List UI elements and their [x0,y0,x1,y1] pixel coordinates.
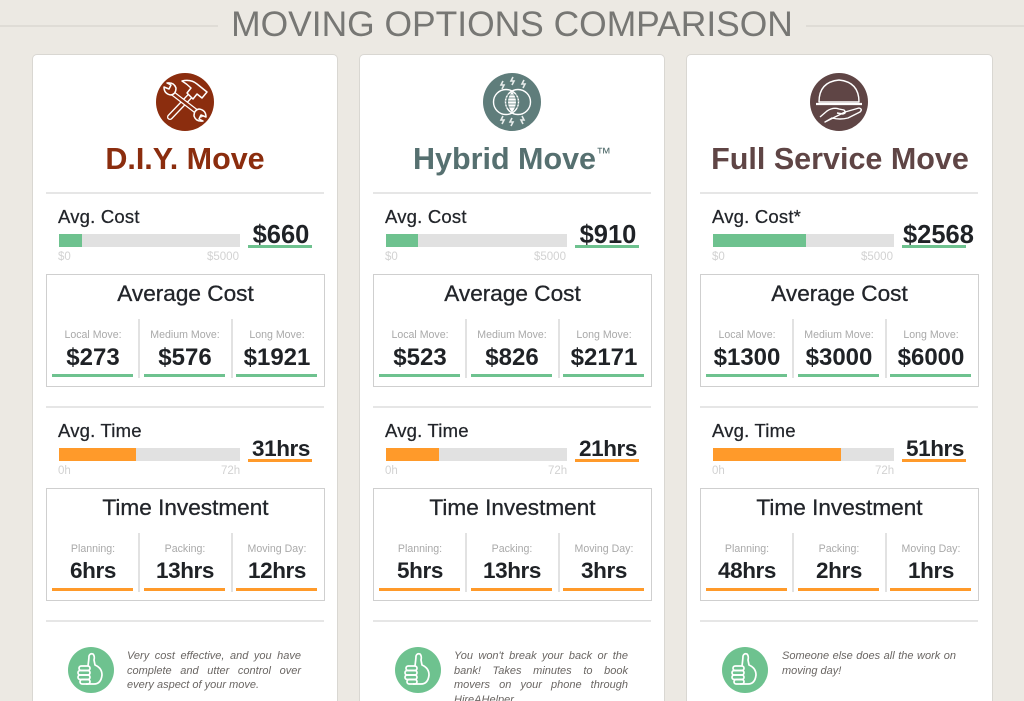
box: time investment: 12hrs [248,558,306,583]
box: time investment: 13hrs [156,558,214,583]
title rule left [0,25,218,27]
box: average cost [46,274,325,387]
bar [386,448,567,461]
label: Avg. Cost [58,206,140,227]
value: 51hrs [906,436,964,461]
box: time investment: 1hrs [908,558,954,583]
scale min: $0 [385,251,398,263]
box: average cost: $1921 [244,344,310,371]
avg cost meter [58,206,312,263]
bar [59,448,240,461]
box: time investment: 2hrs [816,558,862,583]
label: Avg. Cost* [712,206,801,227]
box: time investment: 3hrs [581,558,627,583]
value: $2568 [903,221,974,249]
icon: thumbs up [722,647,768,693]
box: average cost: $273 [66,344,120,371]
label: Avg. Cost [385,206,467,227]
icon: thumbs up [395,647,441,693]
box: average cost [700,274,979,387]
bar [386,234,567,247]
local: Local Move: [718,329,776,341]
heading: Full Service Move [711,142,969,176]
long: Long Move: [249,329,305,341]
label: Avg. Time [385,420,469,441]
box: time investment: 48hrs [718,558,776,583]
avg cost meter [712,206,974,263]
heading: Time Investment [102,495,269,520]
box: average cost [373,274,652,387]
moving day: Moving Day: [902,543,960,555]
scale max: $5000 [861,251,893,263]
box: time investment: 13hrs [483,558,541,583]
box: average cost: $3000 [806,344,872,371]
planning: Planning: [725,543,769,555]
box: average cost: $826 [485,344,539,371]
value: $910 [580,221,636,249]
local: Local Move: [64,329,122,341]
moving day: Moving Day: [575,543,633,555]
box: time investment [700,488,979,601]
heading: Average Cost [117,281,254,306]
bar [59,234,240,247]
title rule right [806,25,1024,27]
scale max: $5000 [534,251,566,263]
box: time investment: 6hrs [70,558,116,583]
scale max: 72h [548,465,567,477]
panel: hybrid move [359,54,665,701]
box: average cost: $6000 [898,344,964,371]
medium: Medium Move: [150,329,220,341]
heading: Time Investment [756,495,923,520]
moving day: Moving Day: [248,543,306,555]
icon: overlapping circles [483,73,541,131]
medium: Medium Move: [477,329,547,341]
heading: Average Cost [444,281,581,306]
avg time meter [384,420,639,477]
avg time meter [712,420,966,477]
icon: serving cloche and hand [810,73,868,131]
scale min: $0 [58,251,71,263]
long: Long Move: [903,329,959,341]
pro text: Very cost effective, and you have complete and utter control over every aspect of your move. [127,650,301,691]
icon: hammer and wrench [156,73,214,131]
scale max: $5000 [207,251,239,263]
heading: Time Investment [429,495,596,520]
box: time investment: 5hrs [397,558,443,583]
planning: Planning: [398,543,442,555]
scale max: 72h [875,465,894,477]
heading: Average Cost [771,281,908,306]
title: MOVING OPTIONS COMPARISON [231,4,793,44]
box: time investment [46,488,325,601]
box: average cost: $523 [393,344,447,371]
scale min: 0h [58,465,71,477]
icon: thumbs up [68,647,114,693]
panel: full service move [686,54,993,701]
heading: Hybrid Move™ [413,142,611,176]
packing: Packing: [819,543,859,555]
box: average cost: $576 [158,344,212,371]
scale max: 72h [221,465,240,477]
scale min: 0h [712,465,725,477]
pro text: Someone else does all the work on moving day! [782,650,956,677]
label: Avg. Time [58,420,142,441]
scale min: $0 [712,251,725,263]
local: Local Move: [391,329,449,341]
heading: D.I.Y. Move [105,142,265,176]
medium: Medium Move: [804,329,874,341]
panel: D.I.Y. move [32,54,338,701]
scale min: 0h [385,465,398,477]
value: $660 [253,221,309,249]
box: average cost: $2171 [571,344,637,371]
planning: Planning: [71,543,115,555]
value: 21hrs [579,436,637,461]
avg cost meter [384,206,639,263]
packing: Packing: [165,543,205,555]
box: average cost: $1300 [714,344,780,371]
bar [713,234,894,247]
long: Long Move: [576,329,632,341]
box: time investment [373,488,652,601]
bar [713,448,894,461]
avg time meter [58,420,312,477]
label: Avg. Time [712,420,796,441]
value: 31hrs [252,436,310,461]
packing: Packing: [492,543,532,555]
